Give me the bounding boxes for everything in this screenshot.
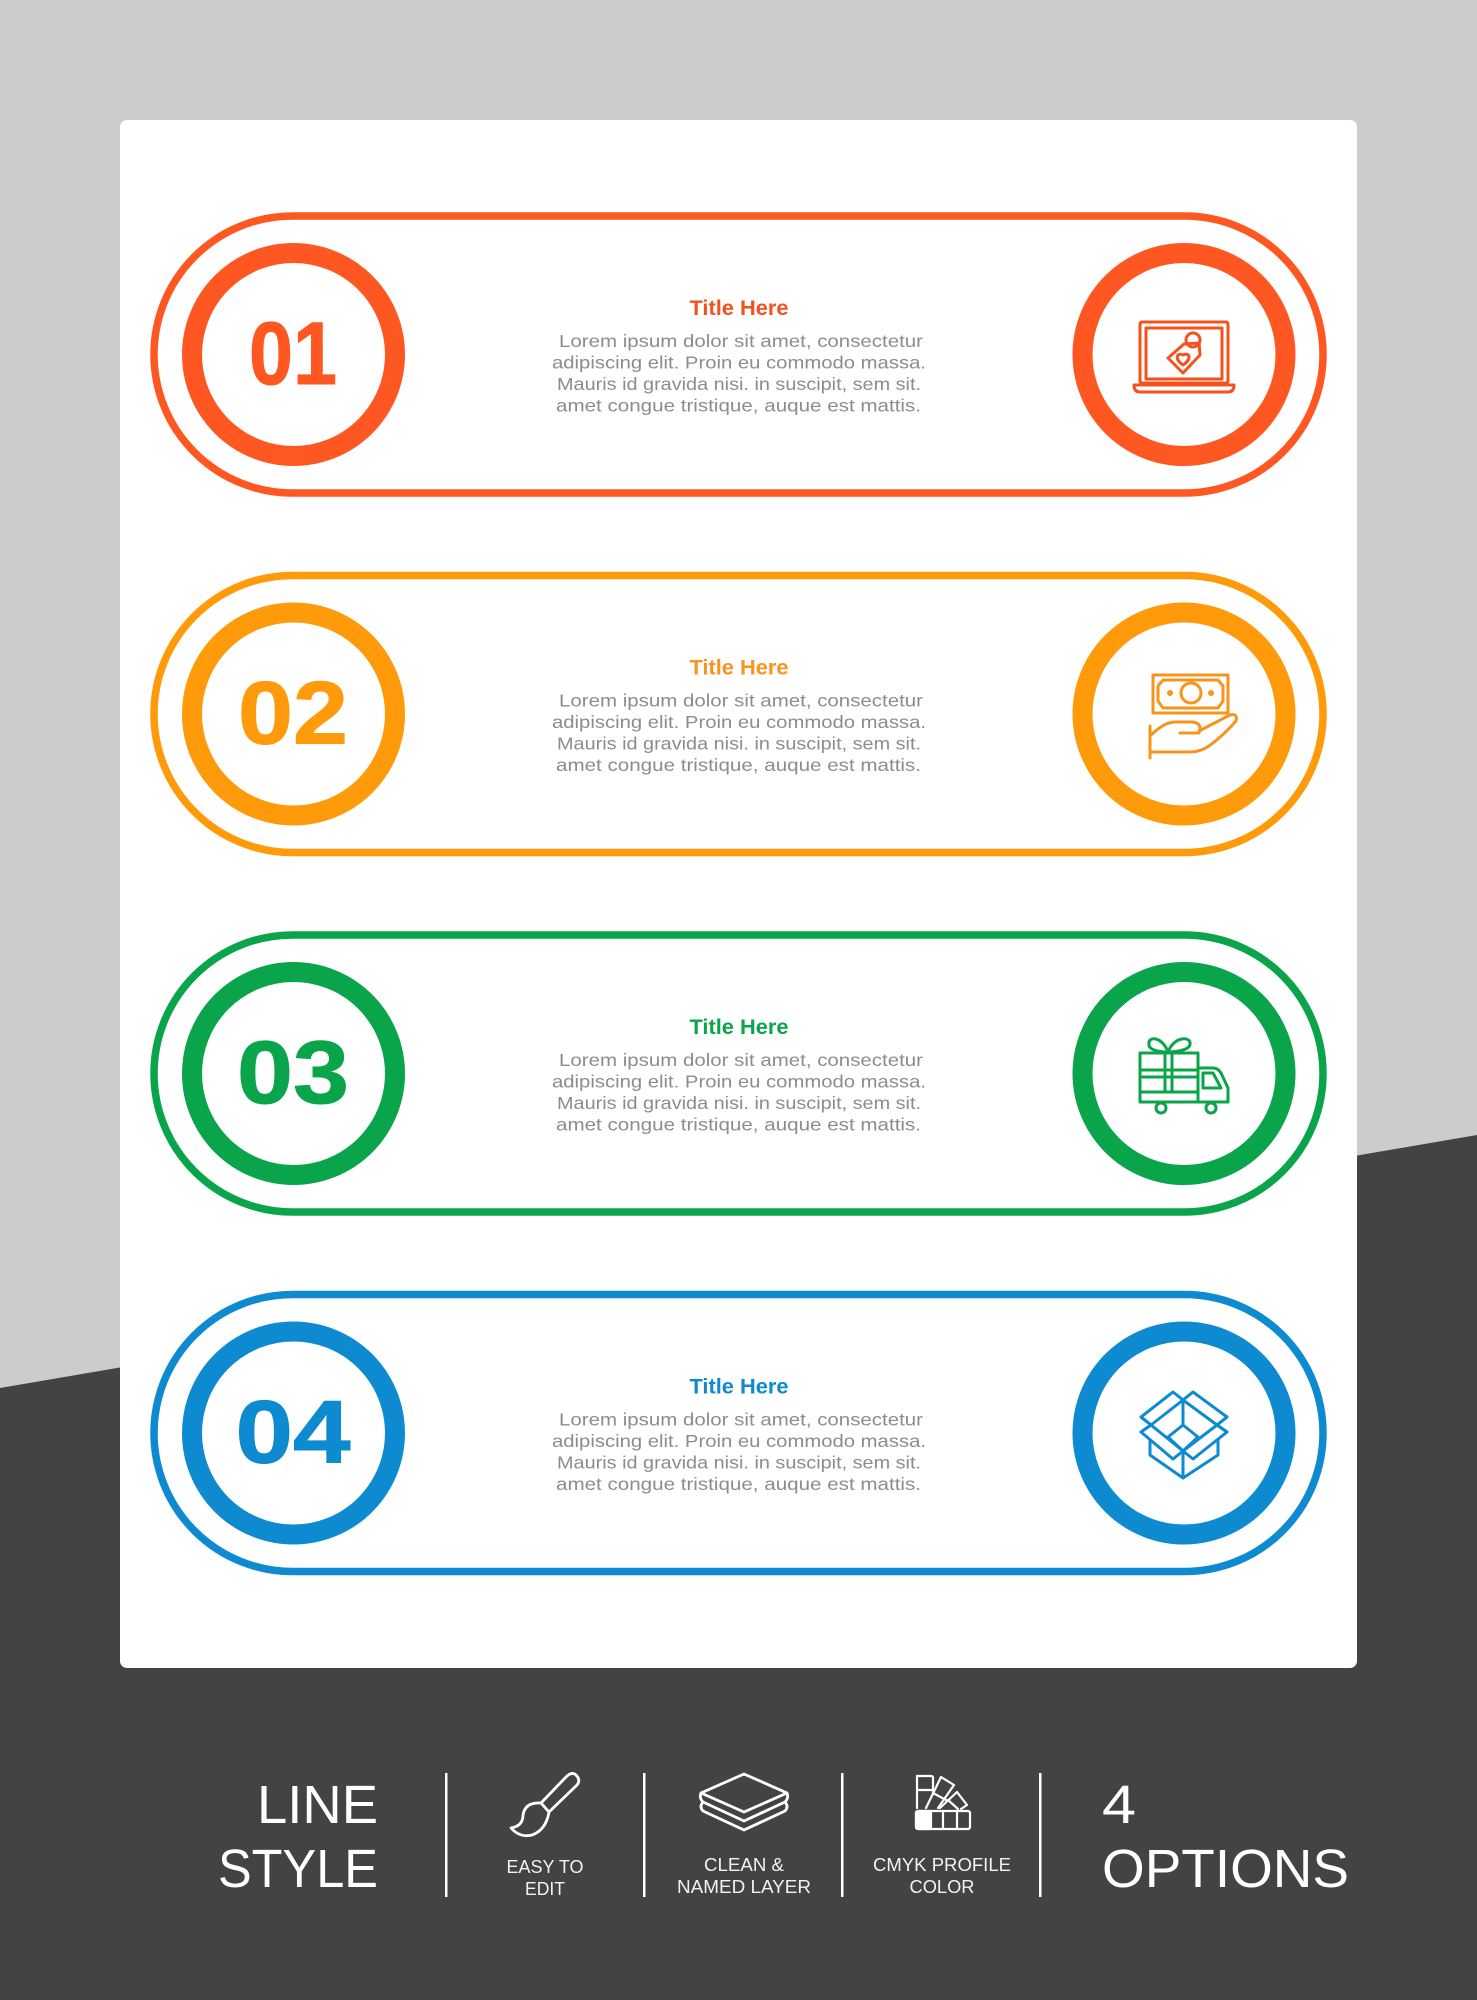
heading: 4 OPTIONS: OPTIONS [1102, 1839, 1349, 1899]
heading: 4 OPTIONS: 4 [1102, 1775, 1136, 1835]
background: dark slanted band [0, 1135, 1477, 2000]
title 04: Title Here [690, 1376, 788, 1398]
number 04: 04 [236, 1382, 351, 1482]
label: easy to edit [506, 1856, 584, 1899]
icon: colour swatches [916, 1776, 970, 1829]
number 03: 03 [237, 1022, 349, 1122]
body text 04: amet congue tristique, auque est mattis. [556, 1474, 921, 1494]
label: CMYK profile color: COLOR [910, 1876, 974, 1897]
label: CMYK profile color: CMYK PROFILE [873, 1854, 1011, 1875]
pill outline 01 [154, 216, 1323, 493]
body text 02: amet congue tristique, auque est mattis. [556, 755, 921, 775]
icon: paint brush [511, 1773, 579, 1836]
icon ring 02 [1082, 612, 1286, 816]
divider 4 [1039, 1773, 1042, 1897]
body text 03: Lorem ipsum dolor sit amet, consectetur [559, 1050, 923, 1070]
panel: white card [120, 120, 1357, 1668]
icon: gift truck [1140, 1039, 1228, 1113]
body text 01: adipiscing elit. Proin eu commodo massa. [552, 352, 926, 372]
body text 02 [552, 690, 926, 775]
body text 04: adipiscing elit. Proin eu commodo massa. [552, 1431, 926, 1451]
body text 03: Mauris id gravida nisi. in suscipit, sem sit. [557, 1093, 921, 1113]
body text 04 [552, 1410, 926, 1494]
panel: option 03 [154, 935, 1323, 1212]
heading: LINE STYLE: LINE [257, 1775, 378, 1835]
feature: clean and named layer [677, 1774, 811, 1897]
icon: open box [1141, 1392, 1227, 1478]
panel: option 02 [154, 576, 1323, 852]
body text 04: Mauris id gravida nisi. in suscipit, sem sit. [557, 1452, 921, 1472]
body text 02: Lorem ipsum dolor sit amet, consectetur [559, 690, 923, 710]
body text 04: Lorem ipsum dolor sit amet, consectetur [559, 1410, 923, 1430]
number 01: 01 [249, 303, 337, 403]
label: clean and named layer: CLEAN & [704, 1854, 785, 1875]
number ring 04 [192, 1332, 395, 1534]
body text 03: adipiscing elit. Proin eu commodo massa. [552, 1072, 926, 1092]
body text 01 [552, 331, 926, 416]
feature: easy to edit [506, 1773, 584, 1899]
feature: CMYK profile color [873, 1776, 1011, 1897]
title 03: Title Here [690, 1016, 788, 1039]
panel: option 01 [154, 216, 1323, 493]
label: clean and named layer [677, 1854, 811, 1897]
number 02: 02 [238, 662, 348, 762]
title 01: Title Here [690, 297, 788, 320]
body text 01: Lorem ipsum dolor sit amet, consectetur [559, 331, 923, 351]
body text 01: Mauris id gravida nisi. in suscipit, sem sit. [557, 374, 921, 394]
body text 02: Mauris id gravida nisi. in suscipit, sem sit. [557, 734, 921, 754]
label: easy to edit: EASY TO [506, 1856, 584, 1877]
label: CMYK profile color [873, 1854, 1011, 1897]
pill outline 02 [154, 576, 1323, 852]
title 02: Title Here [690, 656, 788, 680]
body text 03: amet congue tristique, auque est mattis. [556, 1114, 921, 1134]
icon ring 04 [1082, 1332, 1286, 1534]
icon: hand holding banknote [1150, 675, 1236, 758]
panel: option 04 [154, 1294, 1323, 1572]
divider 2 [643, 1773, 646, 1897]
divider 1 [445, 1773, 448, 1897]
icon: laptop with price tag [1134, 322, 1234, 392]
body text 02: adipiscing elit. Proin eu commodo massa. [552, 712, 926, 732]
divider 3 [841, 1773, 844, 1897]
body text 01: amet congue tristique, auque est mattis. [556, 396, 921, 416]
label: easy to edit: EDIT [525, 1878, 565, 1899]
body text 03 [552, 1050, 926, 1134]
label: clean and named layer: NAMED LAYER [677, 1876, 811, 1897]
icon ring 03 [1082, 972, 1286, 1175]
heading: LINE STYLE [218, 1775, 378, 1899]
icon ring 01 [1082, 253, 1286, 456]
pill outline 04 [154, 1294, 1323, 1572]
number ring 03 [192, 972, 395, 1175]
heading: LINE STYLE: STYLE [218, 1839, 378, 1899]
number ring 02 [192, 612, 395, 816]
icon: stacked layers [700, 1774, 788, 1830]
pill outline 03 [154, 935, 1323, 1212]
number ring 01 [192, 253, 395, 456]
heading: 4 OPTIONS [1102, 1775, 1349, 1899]
